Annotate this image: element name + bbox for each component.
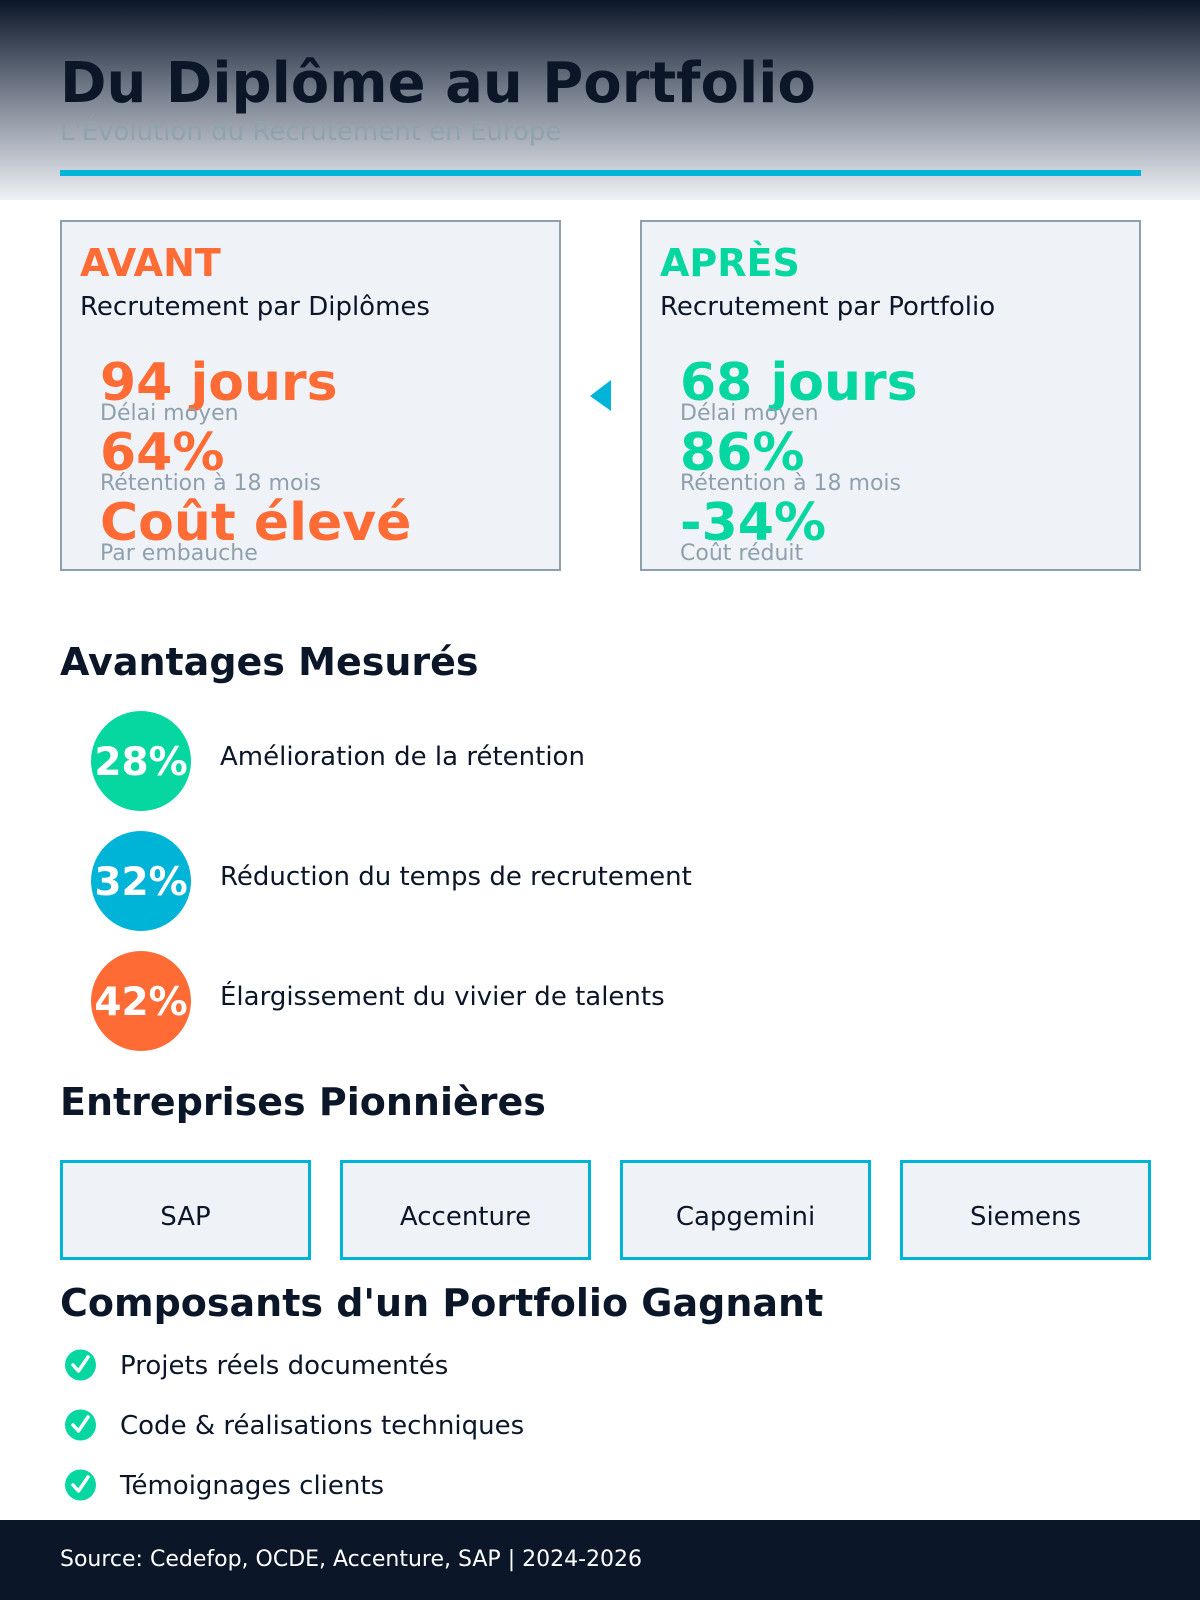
stat: rétention après xyxy=(680,423,901,496)
stat: délai avant: Délai moyen xyxy=(100,401,239,426)
footer: Source: Cedefop, OCDE, Accenture, SAP | 2024-2026 xyxy=(60,1547,642,1572)
stat: coût avant: Par embauche xyxy=(100,541,258,566)
panel: avant: Recrutement par Diplômes xyxy=(80,292,430,322)
company: SAP xyxy=(62,1162,310,1258)
checklist item 1: Projets réels documentés xyxy=(120,1351,448,1381)
stat: rétention après: Rétention à 18 mois xyxy=(680,471,901,496)
benefit: vivier: Élargissement du vivier de talents xyxy=(220,980,665,1012)
company: Accenture xyxy=(342,1162,590,1258)
heading: composants: Composants d'un Portfolio Gagnant xyxy=(60,1281,823,1325)
stat: coût avant: Coût élevé xyxy=(100,493,411,553)
panel: avant xyxy=(61,221,560,570)
stat: délai après: 68 jours xyxy=(680,353,918,413)
subtitle: L'Évolution du Recrutement en Europe xyxy=(60,115,561,147)
title: Du Diplôme au Portfolio xyxy=(60,51,816,116)
heading: avantages mesurés: Avantages Mesurés xyxy=(60,640,479,684)
heading: entreprises pionnières: Entreprises Pionnières xyxy=(60,1080,546,1124)
benefit: rétention: 28% xyxy=(94,740,188,785)
stat: délai après: Délai moyen xyxy=(680,401,819,426)
stat: rétention après: 86% xyxy=(680,423,804,483)
panel heading: après: APRÈS xyxy=(660,241,800,285)
benefit: vivier xyxy=(91,951,665,1051)
footer xyxy=(0,1520,1200,1600)
stat: coût après: Coût réduit xyxy=(680,541,804,566)
stat: délai avant: 94 jours xyxy=(100,353,338,413)
panel: après xyxy=(641,221,1140,570)
benefit: vivier: 42% xyxy=(94,980,188,1025)
stat: rétention avant xyxy=(100,423,321,496)
benefit: temps xyxy=(91,831,692,931)
stat: coût après: -34% xyxy=(680,493,826,553)
benefit: temps: 32% xyxy=(94,860,188,905)
company: Capgemini xyxy=(622,1162,870,1258)
checklist item 2: Code & réalisations techniques xyxy=(120,1411,524,1441)
stat: rétention avant: 64% xyxy=(100,423,224,483)
arrow xyxy=(590,380,611,411)
company: SAP: SAP xyxy=(160,1202,211,1232)
benefit: rétention: Amélioration de la rétention xyxy=(220,742,585,772)
company: Siemens xyxy=(902,1162,1150,1258)
benefit: rétention xyxy=(91,711,585,811)
panel: après: Recrutement par Portfolio xyxy=(660,292,995,322)
header xyxy=(0,0,1200,200)
company: Accenture: Accenture xyxy=(400,1202,531,1232)
benefit: temps: Réduction du temps de recrutement xyxy=(220,862,692,892)
stat: rétention avant: Rétention à 18 mois xyxy=(100,471,321,496)
panel heading: avant: AVANT xyxy=(80,241,221,285)
checklist item 3: Témoignages clients xyxy=(119,1471,384,1501)
company: Capgemini: Capgemini xyxy=(676,1202,815,1232)
company: Siemens: Siemens xyxy=(970,1202,1081,1232)
